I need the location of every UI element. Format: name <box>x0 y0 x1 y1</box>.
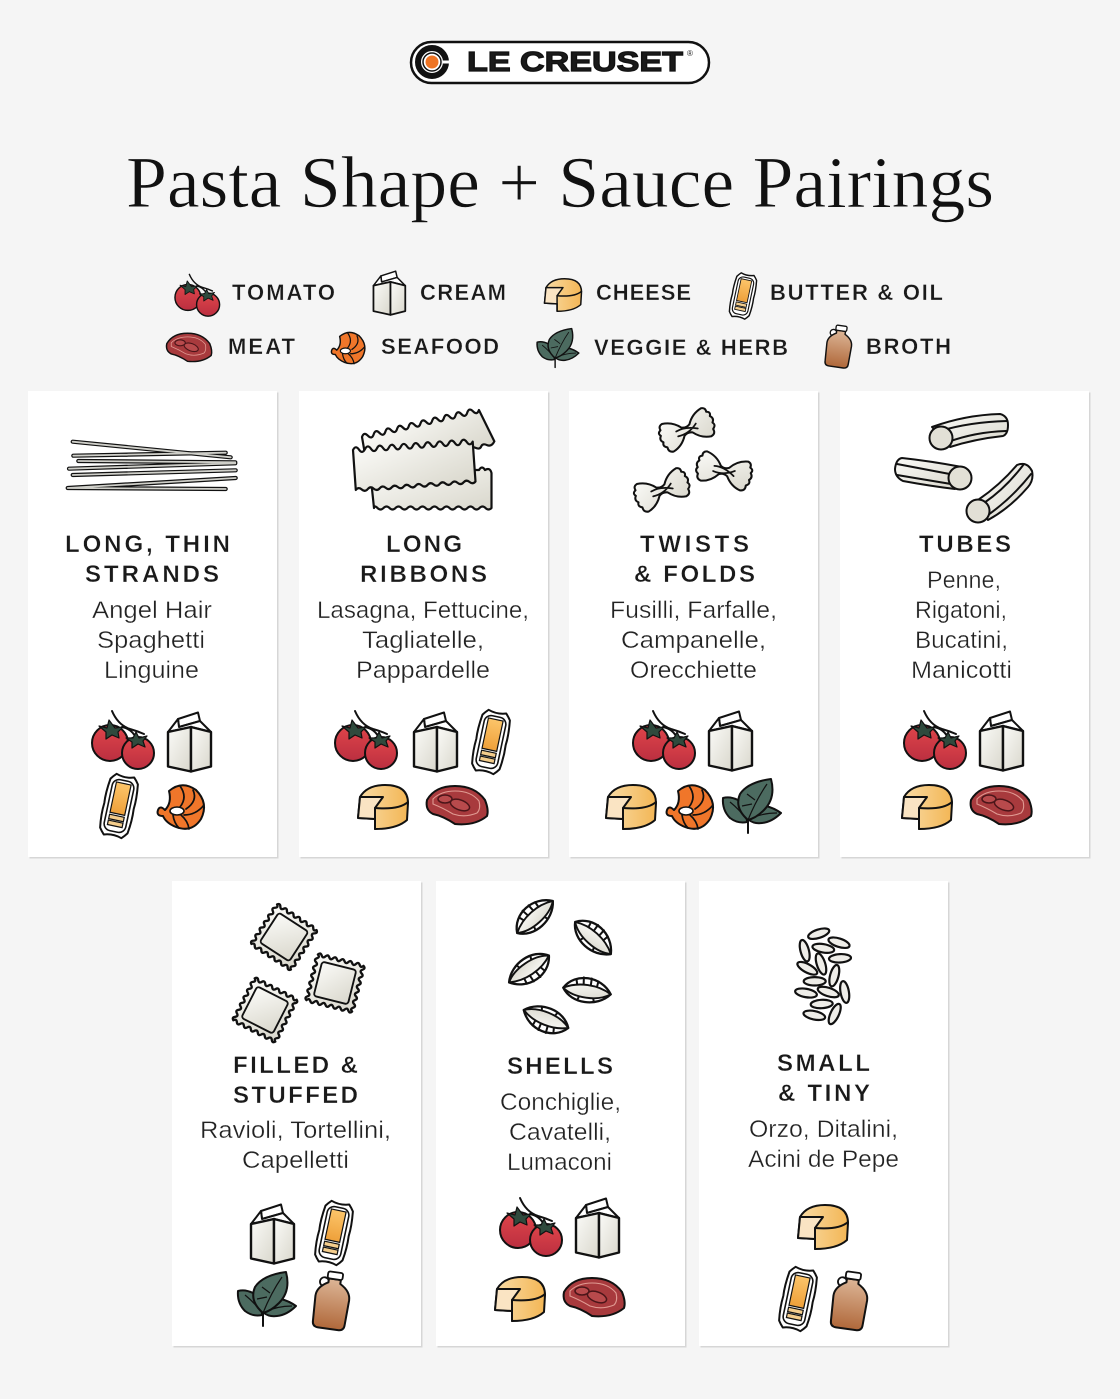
legend item: tomato: TOMATO <box>232 280 335 305</box>
heading: RIBBONS <box>360 561 487 588</box>
panel: shells <box>436 881 686 1348</box>
legend item: butter and oil <box>728 272 943 320</box>
pasta names: Spaghetti <box>97 627 205 654</box>
pasta names <box>317 597 529 684</box>
pasta names: Lasagna, Fettucine, <box>317 597 529 624</box>
pasta names: Pappardelle <box>356 657 490 684</box>
pasta names: Acini de Pepe <box>748 1146 899 1173</box>
sauce icons <box>92 711 211 840</box>
pasta names: Lumaconi <box>507 1149 612 1176</box>
pasta names: Orzo, Ditalini, <box>749 1116 898 1143</box>
legend item: cream <box>373 271 506 315</box>
heading <box>233 1052 358 1109</box>
pasta names <box>92 597 212 684</box>
legend item: cheese: CHEESE <box>596 280 691 305</box>
panel: long ribbons <box>299 391 550 858</box>
panel: twists and folds <box>569 391 820 858</box>
legend item: cheese <box>544 279 691 311</box>
legend item: cream: CREAM <box>420 280 506 305</box>
pasta names: Tagliatelle, <box>362 627 484 654</box>
pasta illustration: farfalle <box>630 406 755 514</box>
pasta names: Ravioli, Tortellini, <box>200 1117 391 1144</box>
legend item: meat <box>167 333 296 362</box>
heading: LONG, THIN <box>65 531 230 558</box>
heading: & TINY <box>778 1080 870 1107</box>
legend item: broth: BROTH <box>866 334 951 359</box>
pasta names: Cavatelli, <box>509 1119 611 1146</box>
pasta names <box>911 567 1012 684</box>
legend item: tomato <box>175 274 335 316</box>
heading: STRANDS <box>85 561 219 588</box>
pasta illustration: ravioli <box>231 902 365 1044</box>
logo: Le Creuset: LE CREUSET <box>467 46 683 77</box>
pasta illustration: strands <box>68 442 236 489</box>
heading: SHELLS <box>507 1053 613 1080</box>
legend item: veggie and herb <box>537 329 788 367</box>
panel: long, thin strands <box>28 391 278 858</box>
sauce icons <box>495 1198 625 1321</box>
legend item: veggie and herb: VEGGIE & HERB <box>594 335 788 360</box>
heading: TWISTS <box>640 531 749 558</box>
heading <box>65 531 230 588</box>
panel: filled and stuffed <box>172 881 422 1348</box>
pasta names: Fusilli, Farfalle, <box>610 597 777 624</box>
legend item: seafood <box>331 332 499 364</box>
pasta names <box>200 1117 391 1174</box>
sauce icons <box>902 711 1032 829</box>
pasta names: Bucatini, <box>915 627 1008 654</box>
legend item: butter and oil: BUTTER & OIL <box>770 280 943 305</box>
pasta names: Capelletti <box>242 1147 349 1174</box>
title: Pasta Shape + Sauce Pairings <box>126 142 994 223</box>
pasta illustration: ribbons <box>353 406 495 510</box>
sauce icons <box>238 1199 355 1331</box>
sauce icons <box>335 708 512 829</box>
sauce icons <box>777 1205 871 1333</box>
pasta names: Linguine <box>104 657 199 684</box>
pasta names: Angel Hair <box>92 597 212 624</box>
pasta names: Orecchiette <box>630 657 757 684</box>
logo: Le Creuset <box>411 42 709 83</box>
heading <box>777 1050 870 1107</box>
heading: LONG <box>386 531 462 558</box>
panel: small and tiny <box>699 881 950 1348</box>
pasta names: Rigatoni, <box>915 597 1007 624</box>
heading: STUFFED <box>233 1082 358 1109</box>
legend item: seafood: SEAFOOD <box>381 334 499 359</box>
pasta names <box>610 597 777 684</box>
legend item: meat: MEAT <box>228 334 296 359</box>
heading: FILLED & <box>233 1052 358 1079</box>
pasta names: Conchiglie, <box>500 1089 621 1116</box>
pasta illustration: orzo <box>794 926 851 1026</box>
pasta names: Campanelle, <box>621 627 766 654</box>
heading: TUBES <box>919 531 1011 558</box>
pasta names <box>500 1089 621 1176</box>
heading: SMALL <box>777 1050 870 1077</box>
panel: tubes <box>840 391 1090 858</box>
pasta names: Manicotti <box>911 657 1012 684</box>
pasta names: Penne, <box>927 567 1001 594</box>
logo: Le Creuset: ® <box>687 49 693 58</box>
legend <box>167 271 951 369</box>
heading <box>634 531 755 588</box>
heading <box>360 531 487 588</box>
heading: & FOLDS <box>634 561 755 588</box>
pasta names <box>748 1116 899 1173</box>
sauce icons <box>606 711 781 833</box>
pasta illustration: tubes <box>895 414 1032 522</box>
legend item: broth <box>824 324 951 369</box>
pasta illustration: shells <box>503 891 620 1040</box>
